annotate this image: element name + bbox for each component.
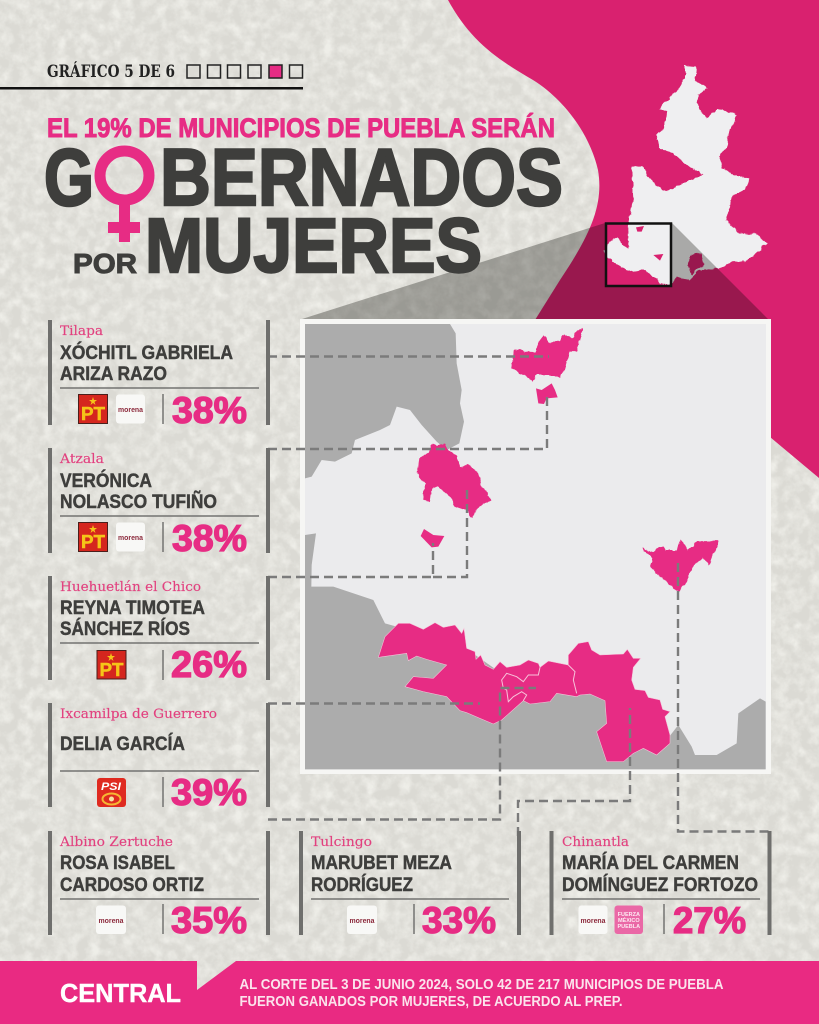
title POR: POR — [73, 248, 137, 279]
logo CENTRAL: CENTRAL — [60, 978, 181, 1008]
logo PT: PT — [81, 404, 105, 424]
logo Fuerza por México Puebla — [614, 906, 643, 934]
candidate name: NOLASCO TUFIÑO — [60, 491, 217, 513]
card: Tilapa — [48, 320, 270, 431]
logo morena — [116, 394, 145, 424]
logo Fuerza por México Puebla: PUEBLA — [617, 924, 640, 930]
dashed leader lines — [268, 356, 770, 836]
map: neighbouring state south — [305, 533, 766, 769]
logo morena — [96, 906, 126, 934]
card: Albino Zertuche — [48, 831, 270, 941]
zoom locator box — [606, 224, 671, 286]
logo Fuerza por México Puebla: MÉXICO — [618, 916, 640, 924]
candidate name: RODRÍGUEZ — [311, 874, 413, 896]
vote percentage: 39% — [171, 772, 247, 813]
title MUJERES: MUJERES — [145, 203, 482, 289]
candidate name: ARIZA RAZO — [60, 364, 167, 385]
map: southern municipalities — [378, 623, 670, 762]
logo morena — [578, 906, 608, 934]
logo PSI — [97, 778, 126, 807]
municipality name: Chinantla — [562, 835, 629, 850]
candidate name: DOMÍNGUEZ FORTOZO — [562, 874, 758, 896]
magenta blob background — [448, 0, 819, 478]
logo morena: morena — [350, 918, 375, 925]
logo morena: morena — [98, 918, 124, 925]
logo morena — [116, 522, 145, 552]
icon: female symbol — [100, 151, 149, 242]
vote percentage: 26% — [171, 644, 247, 685]
chart counter — [47, 61, 302, 82]
zoomed municipal map — [302, 322, 768, 772]
map: neighbouring state north-west — [305, 324, 464, 478]
municipality name: Albino Zertuche — [59, 835, 173, 850]
candidate name: ROSA ISABEL — [60, 853, 175, 874]
title G: G — [44, 133, 94, 223]
vote percentage: 38% — [172, 518, 247, 559]
candidate name — [60, 342, 233, 385]
logo morena: morena — [118, 535, 143, 542]
municipality name: Tulcingo — [311, 835, 372, 850]
vote percentage: 33% — [422, 900, 496, 941]
counter squares — [187, 65, 302, 78]
candidate name — [60, 598, 205, 640]
candidate name: MARÍA DEL CARMEN — [562, 852, 739, 874]
map: municipality small west — [421, 529, 444, 547]
footer note: AL CORTE DEL 3 DE JUNIO 2024, SOLO 42 DE 217 MUNICIPIOS DE PUEBLA — [240, 976, 724, 993]
map: municipality Tilapa — [512, 328, 583, 381]
municipality name: Atzala — [59, 452, 104, 467]
title BERNADOS: BERNADOS — [160, 133, 563, 223]
candidate name — [562, 852, 758, 896]
logo morena: morena — [580, 918, 606, 925]
logo morena — [347, 906, 377, 934]
municipality name: Tilapa — [60, 324, 103, 339]
zoom projection shadow — [302, 223, 768, 319]
candidate name — [60, 853, 204, 896]
candidate name: VERÓNICA — [60, 470, 152, 492]
logo Fuerza por México Puebla: FUERZA — [618, 912, 640, 918]
logo PT: PT — [81, 532, 105, 552]
vote percentage: 27% — [673, 900, 746, 941]
municipality name: Huehuetlán el Chico — [60, 580, 201, 595]
candidate name: CARDOSO ORTIZ — [60, 875, 204, 896]
vote percentage: 35% — [171, 900, 247, 941]
candidate name: SÁNCHEZ RÍOS — [60, 618, 190, 640]
card: Ixcamilpa de Guerrero — [48, 703, 270, 813]
title kicker: EL 19% DE MUNICIPIOS DE PUEBLA SERÁN — [47, 112, 555, 143]
logo PT — [78, 394, 108, 424]
logo PSI: PSI — [101, 781, 122, 793]
footer note — [240, 976, 724, 1010]
candidate name: XÓCHITL GABRIELA — [60, 342, 233, 364]
map: municipality Huehuetlán el Chico — [417, 443, 491, 518]
card: Huehuetlán el Chico — [48, 576, 270, 685]
counter label: GRÁFICO 5 DE 6 — [47, 61, 175, 82]
candidate name: DELIA GARCÍA — [60, 733, 185, 755]
logo PT — [97, 650, 126, 680]
candidate name — [60, 470, 217, 513]
state map of Puebla — [603, 65, 767, 285]
candidate name — [311, 853, 452, 896]
municipality name: Ixcamilpa de Guerrero — [60, 707, 217, 722]
logo PT — [78, 522, 108, 552]
map: municipality Chinantla — [643, 540, 720, 593]
logo morena: morena — [118, 407, 143, 414]
card: Atzala — [48, 448, 270, 559]
title — [44, 112, 563, 289]
map: municipality Atzala — [536, 383, 558, 404]
logo PT: PT — [100, 660, 124, 680]
card: Tulcingo — [299, 831, 521, 941]
footer band — [0, 961, 819, 1024]
candidate name: REYNA TIMOTEA — [60, 598, 205, 619]
footer note: FUERON GANADOS POR MUJERES, DE ACUERDO AL PREP. — [240, 993, 622, 1010]
candidate name: MARUBET MEZA — [311, 853, 452, 874]
card: Chinantla — [550, 831, 772, 941]
vote percentage: 38% — [172, 390, 247, 431]
